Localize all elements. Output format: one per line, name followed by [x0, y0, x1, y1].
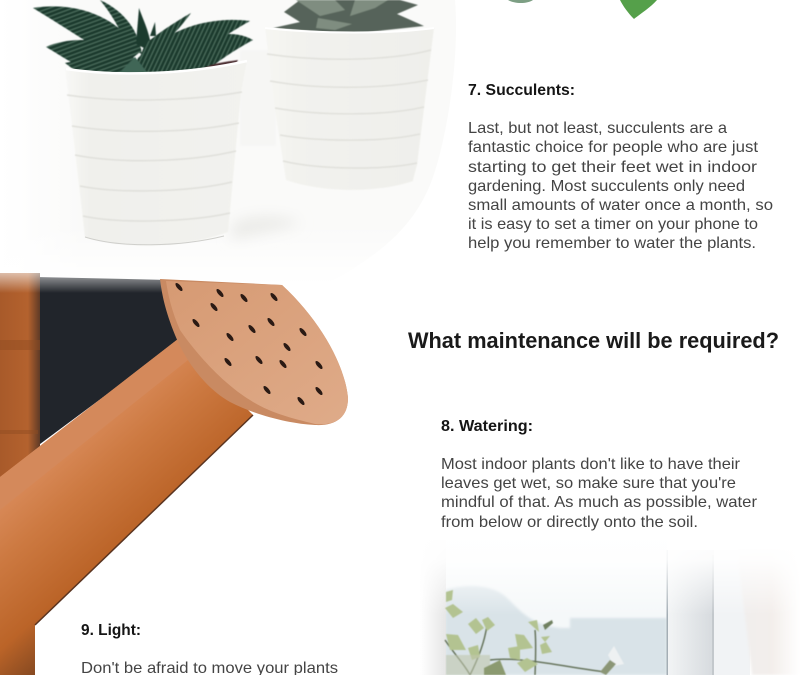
body: Watering: from below or directly onto the soil.	[441, 514, 698, 531]
heading: 8. Watering: 8. Watering:	[441, 418, 533, 435]
left potted succulent	[33, 0, 253, 245]
rose head	[160, 279, 348, 425]
body: Succulents: starting to get their feet wet in indoor	[468, 159, 758, 176]
photo: terracotta watering can	[0, 273, 348, 675]
body: Watering: Most indoor plants don't like to have their	[441, 456, 741, 473]
body: Watering	[441, 456, 758, 531]
rose holes	[174, 282, 324, 406]
dark background behind spout	[36, 277, 180, 447]
text block: 8. Watering	[441, 418, 758, 531]
text block: 9. Light	[81, 622, 338, 675]
photo: two white potted succulents	[0, 0, 460, 285]
body: Succulents: help you remember to water the plants.	[468, 235, 756, 252]
heading: 7. Succulents: 7. Succulents:	[468, 82, 575, 99]
body: Succulents: fantastic choice for people who are just	[468, 139, 759, 156]
body: Succulents: Last, but not least, succulents are a	[468, 120, 727, 137]
distant buildings	[445, 586, 667, 675]
heading: 9. Light: 9. Light:	[81, 622, 141, 639]
text block: 7. Succulents	[468, 82, 773, 252]
section heading: What maintenance will be required?	[408, 328, 779, 353]
rosette	[273, 0, 424, 34]
body: Succulents	[468, 120, 773, 252]
body: Watering: mindful of that. As much as possible, water	[441, 494, 758, 511]
striped succulent leaves	[33, 0, 253, 78]
photo: small plant fragments at top	[508, 0, 657, 19]
vertical pipe of the can	[0, 273, 40, 478]
body: Succulents: gardening. Most succulents only need	[468, 178, 745, 195]
body: Succulents: small amounts of water once a month, so	[468, 197, 773, 214]
plant sprigs	[445, 590, 624, 675]
spout	[0, 339, 253, 675]
body: Succulents: it is easy to set a timer on your phone to	[468, 216, 758, 233]
photo: window with plant	[415, 530, 800, 675]
body: Watering: leaves get wet, so make sure that you're	[441, 475, 736, 492]
right potted succulent	[265, 0, 434, 190]
